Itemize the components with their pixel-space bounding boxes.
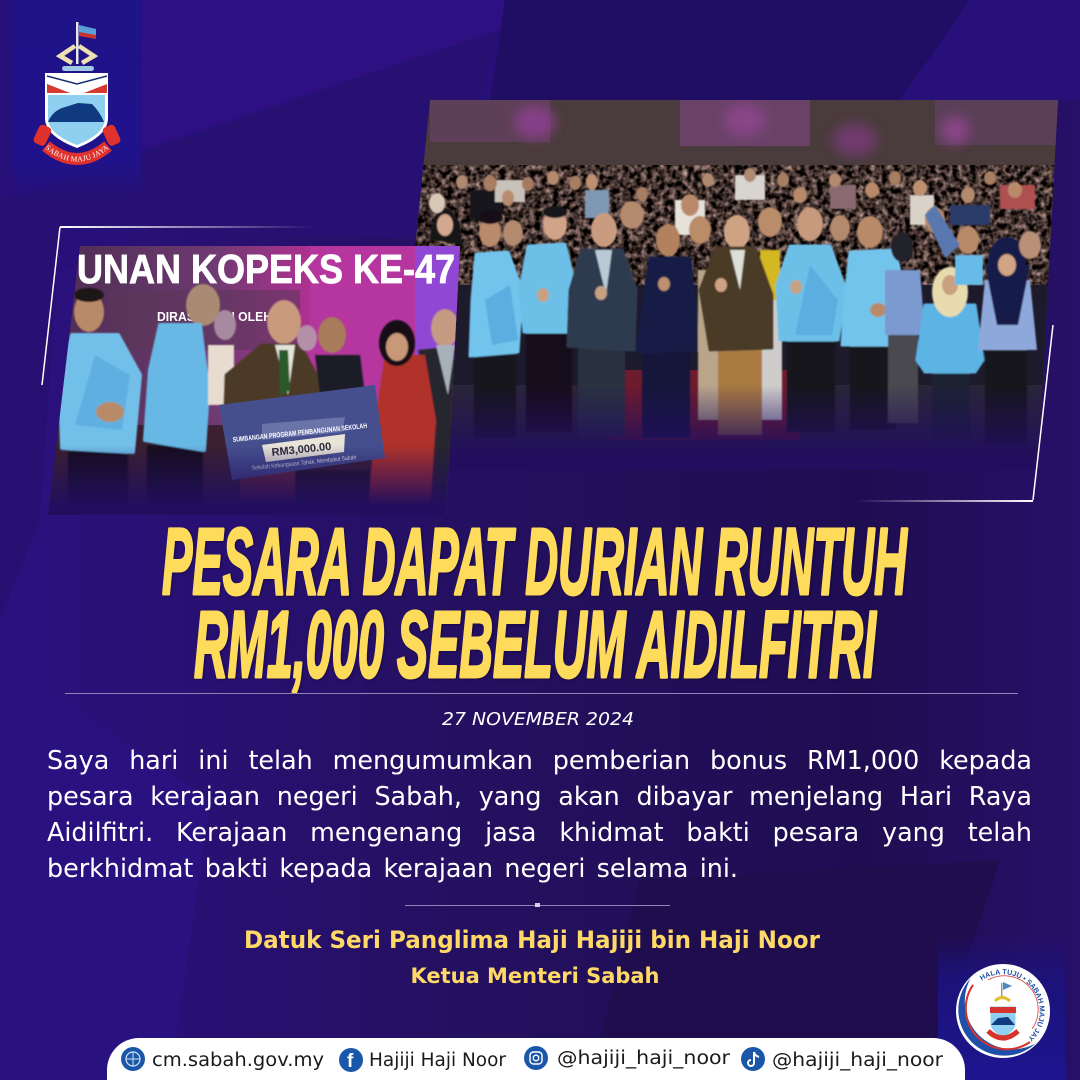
statement text: [47, 745, 1032, 883]
signatory name: Datuk Seri Panglima Haji Hajiji bin Haji Noor: [244, 926, 820, 954]
cheque: [219, 385, 385, 480]
photo: cheque presentation: DIRASMIKAN OLEH: [157, 309, 272, 324]
cheque: Sekolah Kebangsaan Tahak, Membakut Sabah: [252, 455, 357, 472]
white frame: right corner: [855, 325, 1053, 502]
statement text: Saya hari ini telah mengumumkan pemberian bonus RM1,000 kepada: [47, 745, 1032, 775]
badge: Hala Tuju Sabah Maju Jaya: HALA TUJU • SABAH MAJU JAYA: [980, 969, 1045, 1042]
stage banner text: UNAN KOPEKS KE-47: [77, 246, 455, 292]
crest: Sabah coat of arms: SABAH MAJU JAYA: [46, 145, 109, 162]
social bar: [107, 1038, 965, 1080]
cheque: RM3,000.00: [271, 441, 332, 459]
tiktok: [741, 1047, 943, 1071]
statement text: berkhidmat bakti kepada kerajaan negeri selama ini.: [47, 853, 738, 883]
crest: Sabah coat of arms: [34, 22, 120, 165]
figure row: [470, 205, 1041, 445]
title: [162, 509, 908, 698]
statement text: Aidilfitri. Kerajaan mengenang jasa khidmat bakti pesara yang telah: [47, 817, 1032, 847]
audience heads: [429, 168, 1035, 246]
photo: cheque presentation: [40, 246, 465, 521]
stage figures: [60, 284, 465, 515]
instagram: [524, 1046, 730, 1070]
signatory role: Ketua Menteri Sabah: [410, 964, 660, 988]
white frame: left corner: [42, 226, 315, 385]
date: 27 NOVEMBER 2024: [442, 709, 634, 730]
cheque: SUMBANGAN PROGRAM PEMBANGUNAN SEKOLAH: [232, 423, 367, 444]
website: cm.sabah.gov.my: [152, 1050, 324, 1071]
facebook: Hajiji Haji Noor: [369, 1050, 506, 1071]
instagram: @hajiji_haji_noor: [557, 1048, 730, 1069]
statement text: pesara kerajaan negeri Sabah, yang akan dibayar menjelang Hari Raya: [47, 781, 1032, 811]
photo: crowd with chief minister: [410, 100, 1070, 500]
tiktok: @hajiji_haji_noor: [772, 1050, 943, 1071]
facebook: f: [347, 1051, 354, 1072]
